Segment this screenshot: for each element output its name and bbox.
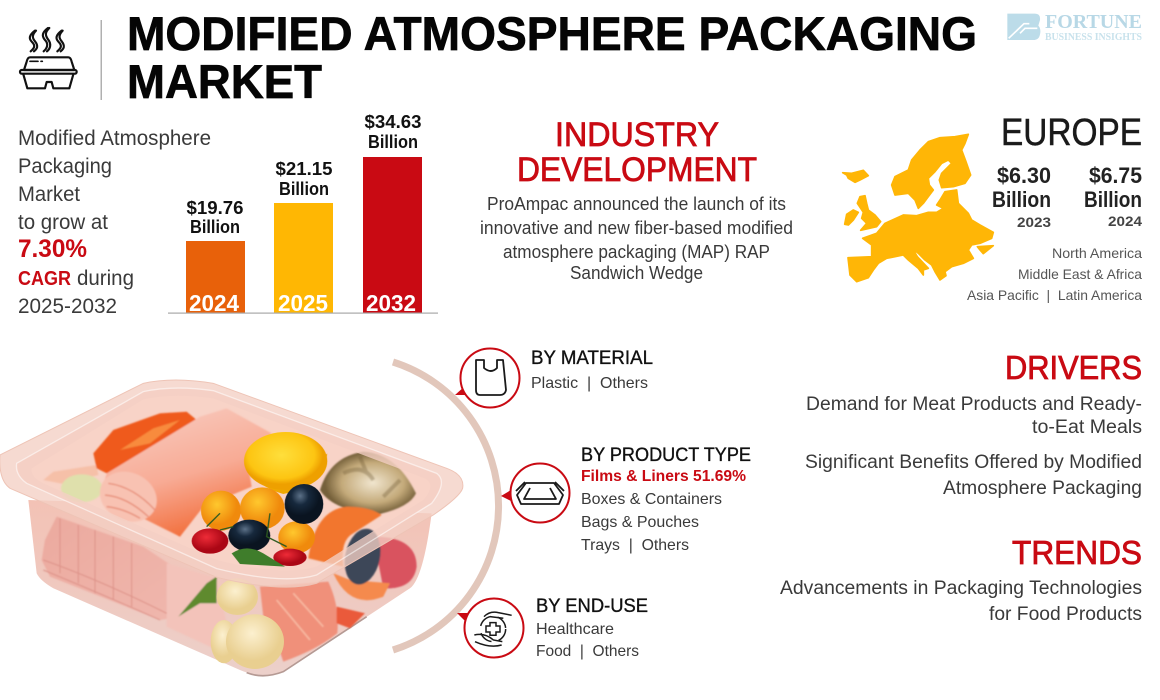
segment: by material bbox=[455, 347, 653, 408]
text block: market growth: Packaging bbox=[18, 155, 112, 178]
title bbox=[127, 7, 977, 108]
text block: development detail: ProAmpac announced the launch of its bbox=[487, 194, 786, 214]
icon: tray bbox=[501, 464, 570, 522]
text block: market growth: 7.30% bbox=[18, 235, 87, 263]
text block: trend: for Food Products bbox=[989, 604, 1142, 625]
text block: market growth: to grow at bbox=[18, 211, 108, 234]
bar: 2025 bbox=[274, 159, 333, 316]
text: by product type: Films & Liners 51.69% bbox=[581, 468, 746, 485]
text: by product type: Bags & Pouches bbox=[581, 514, 699, 531]
icon: food box with steam bbox=[20, 28, 77, 88]
text: by end-use bbox=[536, 595, 648, 660]
tray interior bbox=[16, 388, 441, 579]
text block: development detail bbox=[480, 194, 793, 283]
text block: driver one bbox=[806, 394, 1142, 438]
bar chart: market size bbox=[168, 112, 438, 316]
text block: market growth bbox=[18, 127, 211, 318]
text: by product type: Boxes & Containers bbox=[581, 491, 722, 508]
bar: 2025: Billion bbox=[279, 179, 329, 199]
food: back items bbox=[43, 408, 416, 567]
food: tomatoes and berries bbox=[192, 484, 323, 567]
logo: Fortune Business Insights: FORTUNE bbox=[1045, 11, 1142, 33]
food: eggs bbox=[211, 578, 284, 669]
value: 2024: 2024 bbox=[1108, 213, 1142, 229]
logo: Fortune Business Insights bbox=[1007, 11, 1142, 43]
value: 2023: $6.30 bbox=[997, 163, 1051, 188]
text block: other regions: Middle East & Africa bbox=[1018, 266, 1142, 282]
text block: development detail: atmosphere packaging (MAP) RAP bbox=[503, 242, 770, 262]
map: Europe bbox=[843, 134, 993, 282]
text: by end-use: BY END-USE bbox=[536, 595, 648, 617]
logo: Fortune Business Insights: BUSINESS INSIGHTS bbox=[1045, 32, 1142, 43]
bar: 2024: $19.76 bbox=[186, 198, 244, 218]
food: front items behind tray wall bbox=[42, 517, 417, 662]
bar: 2024 bbox=[186, 198, 245, 316]
text block: driver one: to-Eat Meals bbox=[1032, 417, 1142, 438]
heading: industry development: DEVELOPMENT bbox=[517, 151, 757, 189]
illustration: plastic tray of food bbox=[0, 380, 463, 676]
text: by product type: BY PRODUCT TYPE bbox=[581, 444, 751, 466]
bar: 2025: $21.15 bbox=[276, 159, 332, 179]
bar: 2032: $34.63 bbox=[364, 112, 422, 132]
text block: market growth: CAGR bbox=[18, 268, 71, 290]
text block: market growth: 2025-2032 bbox=[18, 295, 117, 318]
value: 2024: $6.75 bbox=[1089, 163, 1142, 188]
heading: trends: TRENDS bbox=[1012, 534, 1142, 571]
text: by end-use: Food | Others bbox=[536, 643, 639, 660]
segment: by product type bbox=[501, 444, 751, 554]
bar: 2032: 2032 bbox=[366, 290, 416, 316]
icon: plastic bag bbox=[455, 348, 520, 408]
heading: industry development bbox=[517, 116, 757, 189]
segment: by end-use bbox=[457, 595, 648, 660]
panel: drivers bbox=[805, 349, 1142, 499]
heading: drivers: DRIVERS bbox=[1005, 349, 1142, 386]
value: 2023: Billion bbox=[992, 187, 1051, 212]
panel: industry development bbox=[480, 116, 793, 283]
text block: driver one: Demand for Meat Products and Ready- bbox=[806, 394, 1142, 415]
icon: caring hands with cross bbox=[457, 598, 524, 658]
value: 2023: 2023 bbox=[1017, 214, 1051, 230]
text block: trend: Advancements in Packaging Technologies bbox=[780, 578, 1142, 599]
panel: Europe regional figures bbox=[967, 112, 1142, 303]
panel: trends bbox=[780, 534, 1142, 625]
arc connector bbox=[393, 362, 499, 650]
heading: industry development: INDUSTRY bbox=[555, 116, 719, 154]
text: by material: Plastic | Others bbox=[531, 375, 648, 392]
header divider bbox=[100, 20, 102, 100]
bar: 2024: Billion bbox=[190, 217, 240, 237]
text block: trend bbox=[780, 578, 1142, 625]
heading: Europe: EUROPE bbox=[1001, 112, 1142, 154]
text block: development detail: Sandwich Wedge bbox=[570, 263, 703, 283]
text block: market growth: Market bbox=[18, 183, 80, 206]
title: MARKET bbox=[127, 55, 322, 108]
value: 2023 bbox=[992, 163, 1051, 230]
tray body bbox=[28, 500, 432, 675]
text block: market growth: Modified Atmosphere bbox=[18, 127, 211, 150]
bar: 2025: 2025 bbox=[278, 290, 328, 316]
text block: driver two: Significant Benefits Offered by Modified bbox=[805, 452, 1142, 473]
value: 2024 bbox=[1084, 163, 1142, 229]
text block: driver two bbox=[805, 452, 1142, 499]
text: by material: BY MATERIAL bbox=[531, 347, 653, 369]
tray lid rim bbox=[0, 380, 463, 587]
food: lemon bbox=[244, 432, 327, 494]
text: by product type bbox=[581, 444, 751, 554]
bar: 2032: Billion bbox=[368, 132, 418, 152]
bar: 2024: 2024 bbox=[189, 290, 239, 316]
value: 2024: Billion bbox=[1084, 187, 1142, 212]
text: by material bbox=[531, 347, 653, 392]
text block: other regions bbox=[967, 245, 1142, 303]
text block: driver two: Atmosphere Packaging bbox=[943, 478, 1142, 499]
text block: development detail: innovative and new fiber-based modified bbox=[480, 218, 793, 238]
text block: other regions: Asia Pacific | Latin America bbox=[967, 287, 1142, 303]
bar: 2032 bbox=[363, 112, 422, 316]
text block: market growth: during bbox=[77, 267, 134, 290]
text block: other regions: North America bbox=[1052, 245, 1142, 261]
title: MODIFIED ATMOSPHERE PACKAGING bbox=[127, 7, 977, 60]
text: by end-use: Healthcare bbox=[536, 621, 614, 638]
text: by product type: Trays | Others bbox=[581, 537, 689, 554]
